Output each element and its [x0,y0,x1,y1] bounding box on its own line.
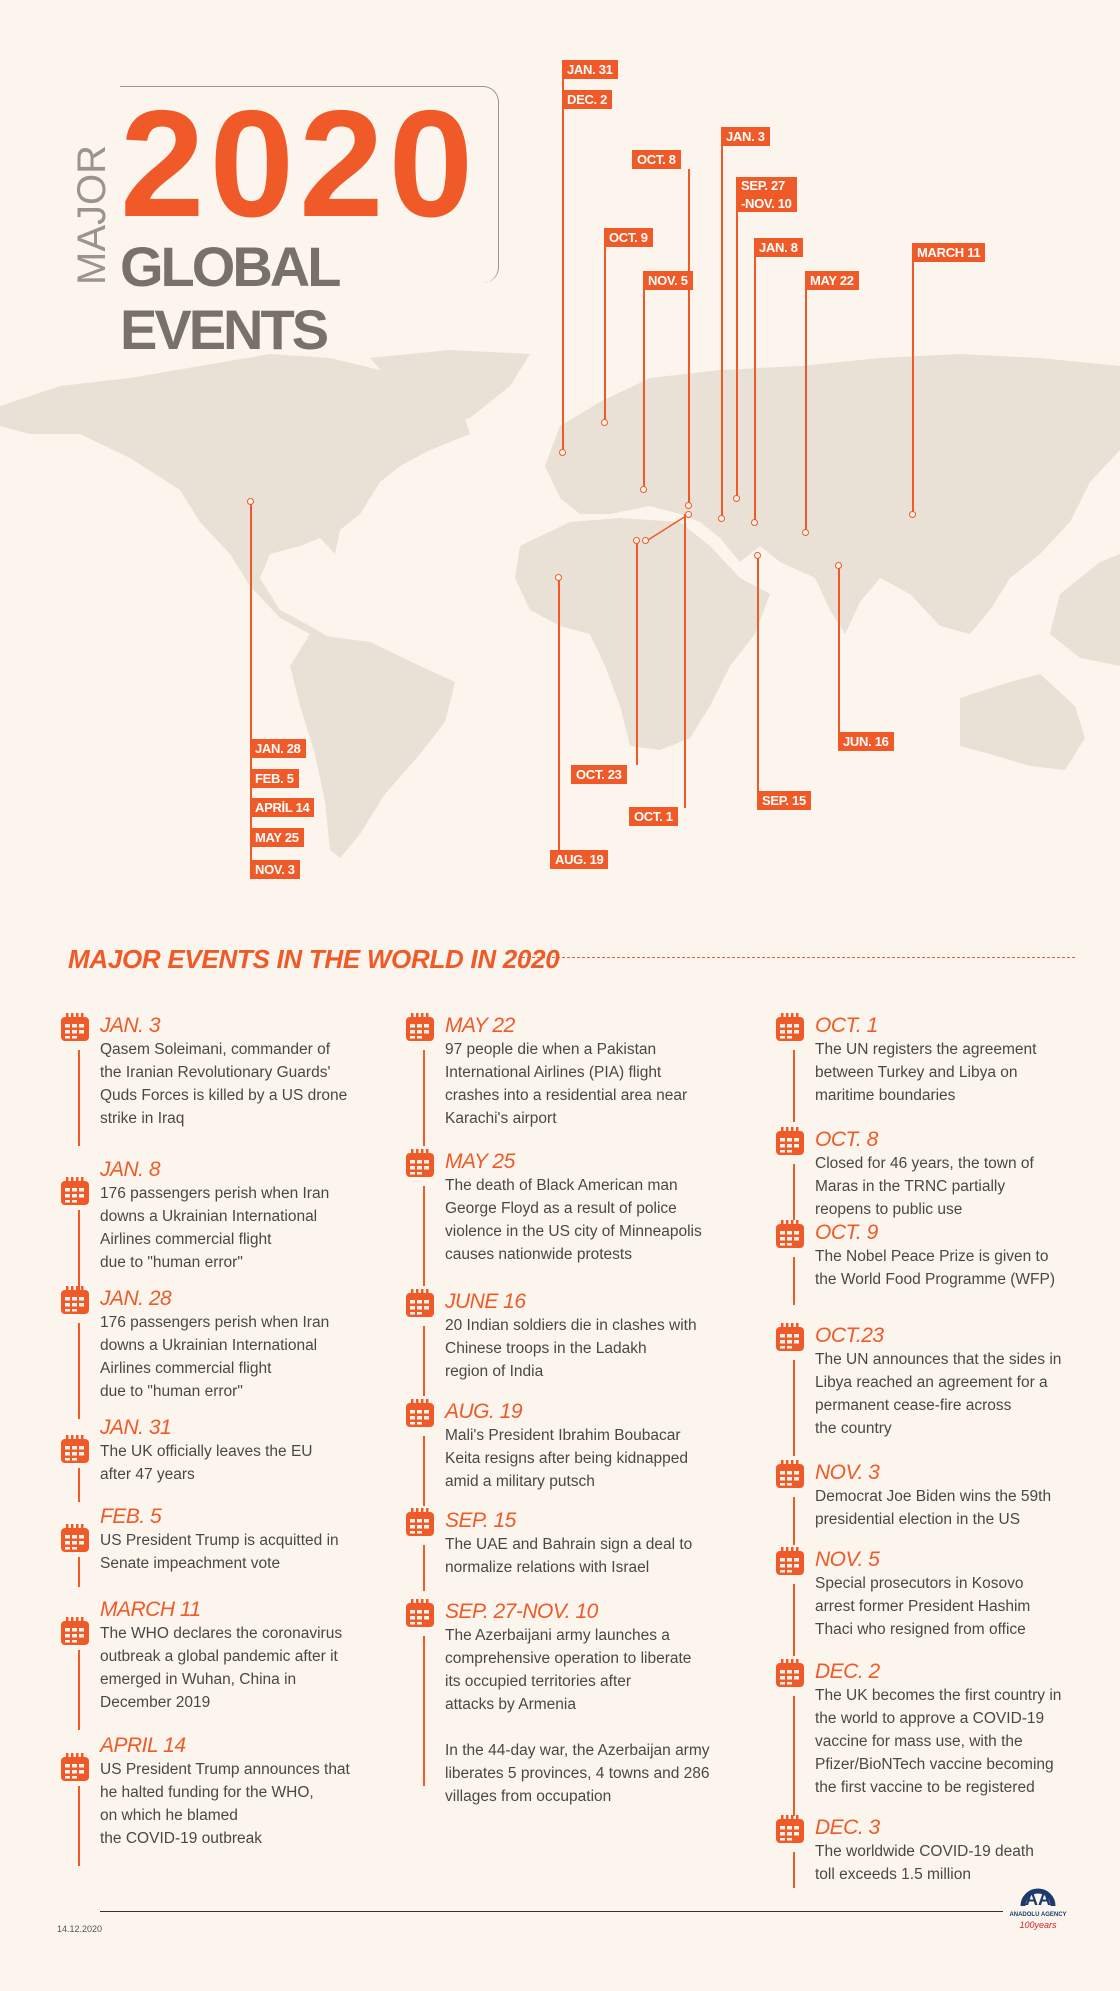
column 3 events: The Nobel Peace Prize is given to [815,1248,1048,1265]
map pins and labels: OCT. 8 [637,152,676,167]
column 1 events: on which he blamed [100,1807,238,1824]
column 1 events: due to "human error" [100,1254,243,1271]
column 2 events: AUG. 19 [445,1400,522,1423]
column 1 events: strike in Iraq [100,1110,184,1127]
column 3 events: maritime boundaries [815,1087,955,1104]
column 2 events: Keita resigns after being kidnapped [445,1450,688,1467]
column 1 events: APRIL 14 [100,1734,186,1757]
column 1 events: the Iranian Revolutionary Guards' [100,1064,330,1081]
column 3 events: NOV. 3 [815,1461,879,1484]
column 1 events: JAN. 3 [100,1014,160,1037]
column 3 events: the first vaccine to be registered [815,1779,1035,1796]
column 3 events: The UN registers the agreement [815,1041,1036,1058]
column 3 events: Thaci who resigned from office [815,1621,1026,1638]
world map [0,350,1120,858]
map pins and labels: JUN. 16 [843,734,889,749]
column 1 events: FEB. 5 [100,1505,161,1528]
column 3 events: vaccine for mass use, with the [815,1733,1023,1750]
map pins and labels: AUG. 19 [555,852,603,867]
column 1 events: downs a Ukrainian International [100,1337,317,1354]
column 2 events [406,1013,710,1805]
section heading: MAJOR EVENTS IN THE WORLD IN 2020 [68,944,559,974]
column 3 events: Maras in the TRNC partially [815,1178,1005,1195]
map pins and labels: DEC. 2 [567,92,607,107]
column 1 events: Senate impeachment vote [100,1555,280,1572]
column 1 events: the COVID-19 outbreak [100,1830,262,1847]
column 1 events: December 2019 [100,1694,210,1711]
column 1 events: emerged in Wuhan, China in [100,1671,296,1688]
column 2 events: JUNE 16 [445,1290,526,1313]
column 3 events: OCT.23 [815,1324,884,1347]
column 3 events: The worldwide COVID-19 death [815,1843,1034,1860]
column 2 events: normalize relations with Israel [445,1559,649,1576]
column 1 events: MARCH 11 [100,1598,201,1621]
column 1 events: due to "human error" [100,1383,243,1400]
column 3 events: OCT. 1 [815,1014,878,1037]
title box [120,86,499,283]
column 2 events: MAY 25 [445,1150,515,1173]
column 1 events: after 47 years [100,1466,195,1483]
title: MAJOR (vertical): MAJOR [70,145,114,285]
column 1 events: downs a Ukrainian International [100,1208,317,1225]
column 1 events: outbreak a global pandemic after it [100,1648,338,1665]
title: GLOBAL EVENTS: EVENTS [120,298,326,361]
footer date: 14.12.2020 [57,1924,102,1934]
map pins and labels: MARCH 11 [917,245,980,260]
column 3 events: the country [815,1420,892,1437]
column 3 events: The UN announces that the sides in [815,1351,1061,1368]
column 1 events: US President Trump announces that [100,1761,350,1778]
column 2 events: The UAE and Bahrain sign a deal to [445,1536,692,1553]
column 2 events: 20 Indian soldiers die in clashes with [445,1317,697,1334]
column 2 events: SEP. 27-NOV. 10 [445,1600,598,1623]
map pins and labels: JAN. 3 [726,129,765,144]
column 3 events: NOV. 5 [815,1548,879,1571]
column 1 events: JAN. 28 [100,1287,171,1310]
column 1 events: he halted funding for the WHO, [100,1784,314,1801]
column 2 events: The Azerbaijani army launches a [445,1627,670,1644]
column 2 events: In the 44-day war, the Azerbaijan army [445,1742,710,1759]
map pins and labels: MAY 22 [810,273,854,288]
column 1 events: 176 passengers perish when Iran [100,1314,329,1331]
column 3 events: OCT. 9 [815,1221,878,1244]
map pins and labels: -NOV. 10 [741,196,792,210]
column 3 events: between Turkey and Libya on [815,1064,1018,1081]
map pins and labels: MAY 25 [255,830,299,845]
map pins and labels: SEP. 27 [741,178,785,193]
column 3 events: permanent cease-fire across [815,1397,1011,1414]
column 3 events: Democrat Joe Biden wins the 59th [815,1488,1051,1505]
map pins and labels: APRİL 14 [255,800,309,815]
column 1 events: Airlines commercial flight [100,1360,271,1377]
map pins and labels: FEB. 5 [255,771,294,786]
logo: Anadolu Agency: ANADOLU AGENCY [1009,1912,1067,1918]
column 3 events: DEC. 3 [815,1816,880,1839]
column 3 events [776,1013,1061,1888]
column 3 events: Special prosecutors in Kosovo [815,1575,1024,1592]
map pins and labels: JAN. 31 [567,62,613,77]
column 2 events: 97 people die when a Pakistan [445,1041,656,1058]
map pins and labels: JAN. 28 [255,741,301,756]
column 2 events: its occupied territories after [445,1673,631,1690]
column 3 events: The UK becomes the first country in [815,1687,1061,1704]
column 3 events: reopens to public use [815,1201,962,1218]
title: 2020: 2020 [120,79,478,249]
column 1 events: 176 passengers perish when Iran [100,1185,329,1202]
column 2 events: SEP. 15 [445,1509,516,1532]
title: GLOBAL EVENTS [120,235,340,361]
column 3 events: OCT. 8 [815,1128,878,1151]
map pins and labels: OCT. 23 [576,767,622,782]
footer line [100,1911,1003,1912]
column 1 events: Airlines commercial flight [100,1231,271,1248]
column 3 events: arrest former President Hashim [815,1598,1030,1615]
map pins and labels: OCT. 9 [609,230,648,245]
column 3 events: the world to approve a COVID-19 [815,1710,1044,1727]
map pins and labels: OCT. 1 [634,809,673,824]
column 2 events: Mali's President Ibrahim Boubacar [445,1427,681,1444]
map pins and labels: NOV. 5 [648,273,688,288]
logo: Anadolu Agency [1009,1888,1067,1930]
column 1 events: JAN. 31 [100,1416,171,1439]
column 2 events: causes nationwide protests [445,1246,632,1263]
column 1 events: The WHO declares the coronavirus [100,1625,342,1642]
map pins and labels [247,60,985,879]
map pins and labels: SEP. 15 [762,793,806,808]
column 1 events [61,1013,350,1866]
column 1 events: US President Trump is acquitted in [100,1532,339,1549]
column 1 events: Quds Forces is killed by a US drone [100,1087,347,1104]
column 1 events: JAN. 8 [100,1158,160,1181]
column 3 events: the World Food Programme (WFP) [815,1271,1055,1288]
column 3 events: presidential election in the US [815,1511,1020,1528]
text: toll exceeds 1.5 million [815,1866,971,1883]
column 3 events: Libya reached an agreement for a [815,1374,1048,1391]
column 2 events: liberates 5 provinces, 4 towns and 286 [445,1765,710,1782]
column 3 events: DEC. 2 [815,1660,880,1683]
column 2 events: violence in the US city of Minneapolis [445,1223,702,1240]
column 2 events: MAY 22 [445,1014,515,1037]
column 2 events: amid a military putsch [445,1473,595,1490]
column 3 events: Closed for 46 years, the town of [815,1155,1034,1172]
map pins and labels: NOV. 3 [255,862,295,877]
column 1 events: The UK officially leaves the EU [100,1443,313,1460]
column 2 events: The death of Black American man [445,1177,678,1194]
column 2 events: International Airlines (PIA) flight [445,1064,661,1081]
column 2 events: Karachi's airport [445,1110,557,1127]
column 2 events: George Floyd as a result of police [445,1200,677,1217]
text: villages from occupation [445,1788,611,1805]
title: GLOBAL EVENTS: GLOBAL [120,235,338,298]
column 2 events: Chinese troops in the Ladakh [445,1340,647,1357]
column 2 events: crashes into a residential area near [445,1087,687,1104]
column 2 events: region of India [445,1363,543,1380]
logo: Anadolu Agency: 100years [1019,1920,1057,1930]
map pins and labels: JAN. 8 [759,240,798,255]
column 2 events: comprehensive operation to liberate [445,1650,691,1667]
column 1 events: Qasem Soleimani, commander of [100,1041,330,1058]
column 2 events: attacks by Armenia [445,1696,576,1713]
column 3 events: Pfizer/BioNTech vaccine becoming [815,1756,1054,1773]
